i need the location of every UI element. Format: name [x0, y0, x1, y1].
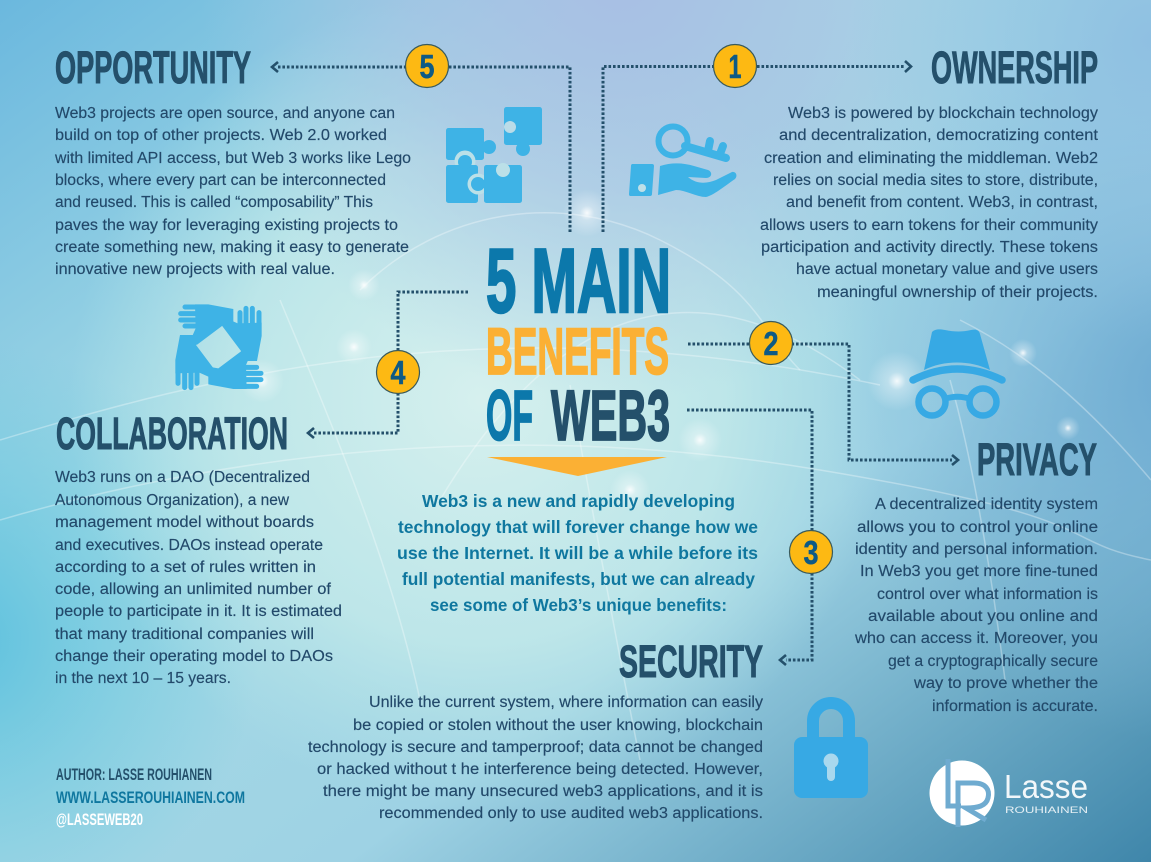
- text: Ownership body: meaningful ownership of their projects.: [817, 284, 1098, 301]
- text: Opportunity body: create something new, making it easy to generate: [55, 239, 409, 256]
- text: Collaboration body: that many traditional companies will: [55, 626, 314, 643]
- text: Ownership body: have actual monetary value and give users: [796, 261, 1098, 278]
- text: Opportunity body: build on top of other projects. Web 2.0 worked: [55, 127, 387, 144]
- text: Ownership body: Web3 is powered by blockchain technology: [788, 105, 1098, 122]
- text: Collaboration body: change their operating model to DAOs: [55, 648, 333, 665]
- title: OF: [486, 377, 533, 456]
- text: Opportunity body: with limited API access, but Web 3 works like Lego: [54, 150, 411, 167]
- text: Security body: or hacked without t he interference being detected. However,: [317, 761, 763, 778]
- logo: Lasse Rouhiainen: ROUHIAINEN: [1005, 805, 1088, 816]
- text: Privacy body: available about you online and: [868, 608, 1098, 625]
- text: Opportunity body: blocks, where every part can be interconnected: [55, 172, 386, 189]
- text: Privacy body: [854, 496, 1098, 715]
- number badge 1: [714, 44, 756, 88]
- text: Privacy body: control over what information is: [877, 586, 1098, 603]
- icon: spy hat and glasses: [913, 329, 1002, 416]
- text: Collaboration body: according to a set of rules written in: [55, 559, 316, 576]
- text: Ownership body: relies on social media sites to store, distribute,: [773, 172, 1098, 189]
- connector: 3 to Security: [687, 410, 812, 665]
- text: Privacy body: way to prove whether the: [913, 675, 1098, 692]
- number badge 2: [750, 322, 792, 364]
- text: Opportunity body: Web3 projects are open source, and anyone can: [55, 105, 395, 122]
- title: 5 MAIN: [486, 231, 671, 332]
- text: Collaboration body: management model without boards: [55, 514, 314, 531]
- text: Privacy body: information is accurate.: [932, 698, 1098, 715]
- text: Privacy body: get a cryptographically secure: [888, 653, 1098, 670]
- text: Ownership body: and decentralization, democratizing content: [779, 127, 1099, 144]
- text: Security body: there might be many unsecured web3 applications, and it is: [323, 783, 763, 800]
- author credits: @LASSEWEB20: [56, 811, 143, 829]
- text: Security body: Unlike the current system, where information can easily: [369, 694, 763, 711]
- text: introduction: Web3 is a new and rapidly developing: [422, 491, 735, 511]
- text: Privacy body: allows you to control your online: [857, 519, 1098, 536]
- title: WEB3: [551, 377, 670, 456]
- text: Security body: recommended only to use audited web3 applications.: [379, 805, 763, 822]
- logo: Lasse Rouhiainen: [930, 759, 1088, 827]
- connector: 1 to Ownership: [603, 61, 911, 232]
- text: Collaboration body: and executives. DAOs instead operate: [55, 537, 323, 554]
- number badge 1: 1: [728, 48, 742, 85]
- text: introduction: [397, 491, 758, 615]
- icon: hand holding key: [629, 126, 736, 197]
- text: introduction: use the Internet. It will be a while before its: [397, 543, 758, 563]
- text: Collaboration body: code, allowing an unlimited number of: [55, 581, 332, 598]
- text: Opportunity body: [54, 105, 411, 278]
- text: Collaboration body: Autonomous Organization), a new: [55, 492, 290, 509]
- text: Privacy body: who can access it. Moreover, you: [854, 630, 1098, 647]
- text: Privacy body: A decentralized identity system: [875, 496, 1098, 513]
- title: [486, 231, 671, 456]
- text: Opportunity body: paves the way for leveraging existing projects to: [55, 217, 398, 234]
- number badge 4: [376, 350, 420, 394]
- text: Collaboration body: people to participate in it. It is estimated: [55, 603, 342, 620]
- text: Collaboration body: in the next 10 – 15 years.: [55, 670, 231, 687]
- icon: padlock: [794, 703, 868, 798]
- number badge 3: [790, 530, 832, 574]
- text: introduction: technology that will forever change how we: [398, 517, 758, 537]
- text: Privacy body: identity and personal information.: [855, 541, 1098, 558]
- author credits: AUTHOR: LASSE ROUHIANEN: [56, 766, 212, 784]
- heading: Security: SECURITY: [619, 636, 763, 687]
- connector: 4 to Collaboration: [308, 292, 468, 438]
- text: Privacy body: In Web3 you get more fine-tuned: [860, 563, 1098, 580]
- connector: 2 to Privacy: [688, 344, 958, 465]
- number badge 5: 5: [420, 48, 434, 85]
- number badge 2: 2: [764, 325, 778, 362]
- connector: 5 to Opportunity: [272, 62, 570, 232]
- author credits: WWW.LASSEROUHIAINEN.COM: [56, 789, 245, 807]
- number badge 4: 4: [390, 354, 406, 391]
- author credits: [56, 766, 245, 829]
- heading: Opportunity: OPPORTUNITY: [55, 42, 251, 93]
- icon: puzzle pieces: [446, 107, 542, 203]
- icon: four linked hands: [175, 304, 262, 389]
- text: Ownership body: creation and eliminating the middleman. Web2: [764, 150, 1098, 167]
- text: Ownership body: and benefit from content. Web3, in contrast,: [786, 194, 1098, 211]
- title: BENEFITS: [486, 314, 669, 388]
- logo: Lasse Rouhiainen: Lasse: [1004, 768, 1088, 805]
- text: Collaboration body: [55, 469, 342, 687]
- text: Opportunity body: and reused. This is called “composability” This: [55, 194, 373, 211]
- text: Security body: be copied or stolen without the user knowing, blockchain: [353, 717, 763, 734]
- arrow: title pointer: [487, 457, 667, 476]
- text: introduction: see some of Web3’s unique benefits:: [430, 595, 727, 615]
- number badge 3: 3: [804, 534, 818, 571]
- text: Collaboration body: Web3 runs on a DAO (Decentralized: [55, 469, 310, 486]
- text: Ownership body: [760, 105, 1099, 301]
- heading: Collaboration: COLLABORATION: [56, 408, 288, 459]
- text: Opportunity body: innovative new projects with real value.: [55, 261, 335, 278]
- text: Ownership body: allows users to earn tokens for their community: [760, 217, 1098, 234]
- number badge 5: [406, 44, 448, 88]
- text: Security body: technology is secure and tamperproof; data cannot be changed: [308, 739, 763, 756]
- text: Security body: [308, 694, 763, 822]
- text: Ownership body: participation and activity directly. These tokens: [761, 239, 1098, 256]
- text: introduction: full potential manifests, but we can already: [402, 569, 755, 589]
